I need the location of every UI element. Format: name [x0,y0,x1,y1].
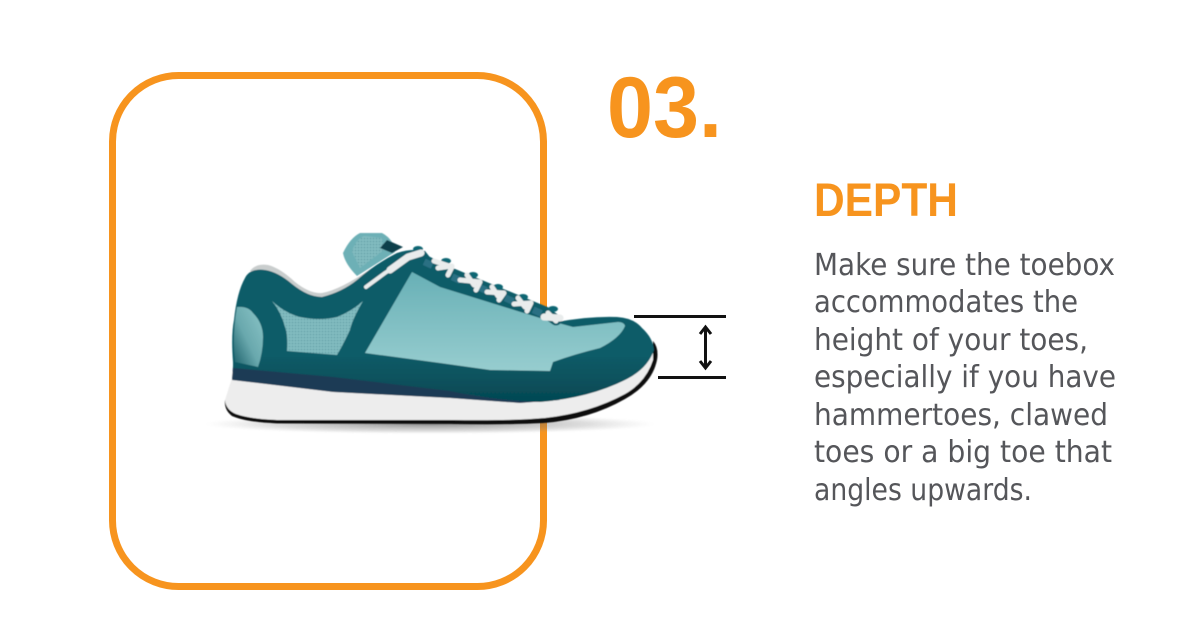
body text: hammertoes, clawed [814,398,1108,433]
sole [225,352,655,421]
sole black edge [225,341,658,424]
eyelet strip [420,258,556,320]
lace row with eyelets [366,246,560,321]
eyelet tabs [413,246,558,317]
heading: DEPTH [814,173,958,226]
body text: toes or a big toe that [814,435,1112,470]
body text [814,248,1116,508]
body text: especially if you have [814,360,1116,395]
heel mesh [234,307,263,367]
depth measure [634,315,726,379]
white laces [366,253,560,321]
body text: height of your toes, [814,323,1088,358]
side mesh [272,301,363,355]
double arrow [700,327,711,368]
midsole [232,366,560,403]
ground shadow [205,414,655,434]
top measure line [634,315,726,318]
upper [232,250,654,402]
shoe opening lining [380,240,403,253]
heel collar lining [250,265,372,299]
step number: 03. [607,60,722,156]
tongue [343,233,395,276]
orange rounded frame [112,76,544,586]
body text: accommodates the [814,285,1078,320]
bottom measure line [658,376,726,379]
body text: Make sure the toebox [814,248,1115,283]
side panel [365,272,625,371]
shoe illustration [205,233,658,434]
body text: angles upwards. [814,473,1032,508]
